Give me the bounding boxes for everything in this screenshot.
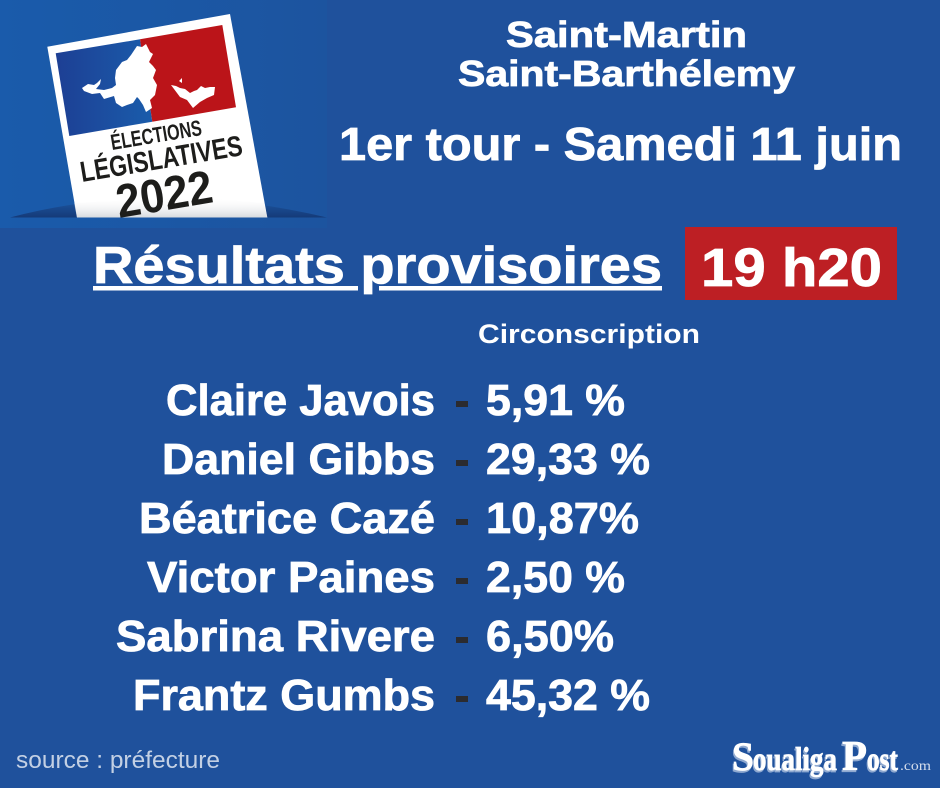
illustration: election ballot logo	[0, 0, 327, 228]
row: Frantz Gumbs	[133, 671, 650, 720]
row: Victor Paines: Victor Paines	[147, 553, 435, 602]
row: Béatrice Cazé: Béatrice Cazé	[139, 494, 435, 543]
logo: Soualiga Post: ost	[866, 744, 897, 780]
logo: Soualiga Post: P	[842, 734, 867, 780]
badge: time: 19 h20	[701, 238, 882, 298]
row: Frantz Gumbs: 45,32 %	[486, 671, 650, 720]
row: Sabrina Rivere: Sabrina Rivere	[116, 612, 435, 661]
logo: Soualiga Post: S	[732, 734, 754, 779]
ballot caption: 2022	[112, 160, 216, 228]
heading: territories: Saint-Martin	[506, 14, 747, 55]
heading: provisional results: Résultats provisoires	[93, 237, 662, 295]
heading: round and date: 1er tour - Samedi 11 juin	[339, 118, 902, 170]
logo: Soualiga Post: P	[841, 736, 866, 782]
row: Claire Javois: Claire Javois	[166, 376, 435, 425]
row: Béatrice Cazé: 10,87%	[486, 494, 639, 543]
map: Saint-Barthélemy	[171, 78, 215, 108]
source note: source : préfecture	[16, 747, 220, 774]
logo: Soualiga Post: S	[731, 736, 753, 781]
badge: time	[685, 227, 897, 300]
row: Béatrice Cazé	[139, 494, 639, 543]
column heading: Circonscription	[478, 319, 700, 349]
map: Saint-Martin	[82, 44, 157, 112]
ballot shadow	[74, 197, 267, 218]
ballot caption: ÉLECTIONS	[109, 115, 204, 155]
row: Sabrina Rivere: 6,50%	[486, 612, 614, 661]
ballot caption: LÉGISLATIVES	[78, 128, 245, 189]
flag red side	[140, 25, 236, 122]
ballot paper	[47, 14, 267, 218]
logo: Soualiga Post	[731, 734, 931, 782]
row: Sabrina Rivere	[116, 612, 614, 661]
row: Victor Paines: 2,50 %	[486, 553, 625, 602]
ballot caption	[80, 120, 242, 218]
row: Daniel Gibbs: 29,33 %	[486, 435, 650, 484]
results table	[116, 376, 650, 720]
heading: territories: Saint-Barthélemy	[458, 53, 795, 94]
logo: Soualiga Post: .com	[900, 759, 931, 774]
row: Frantz Gumbs: Frantz Gumbs	[133, 671, 435, 720]
row: Victor Paines	[147, 553, 625, 602]
row: Daniel Gibbs: Daniel Gibbs	[162, 435, 435, 484]
logo: Soualiga Post: oualiga	[753, 742, 837, 778]
row: Daniel Gibbs	[162, 435, 650, 484]
row: Claire Javois	[166, 376, 625, 425]
flag blue side	[56, 39, 152, 136]
heading: territories	[458, 14, 795, 94]
logo: Soualiga Post: oualiga	[752, 744, 836, 780]
row: Claire Javois: 5,91 %	[486, 376, 625, 425]
logo: Soualiga Post: ost	[867, 742, 898, 778]
